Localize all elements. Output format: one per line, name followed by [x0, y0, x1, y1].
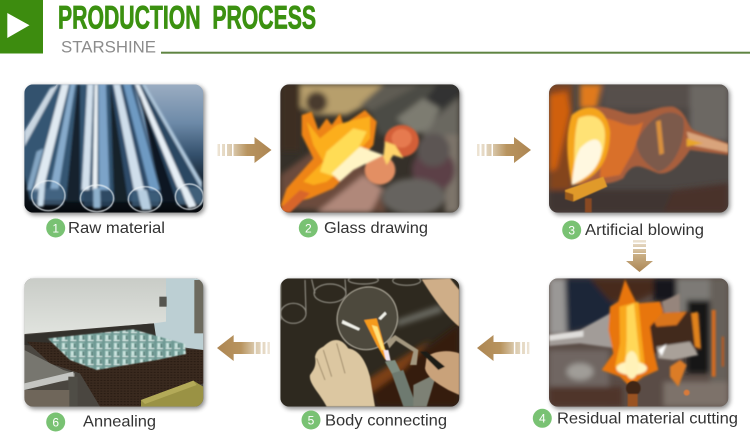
- caption 6: Annealing: [83, 414, 156, 430]
- caption 2: Glass drawing: [324, 220, 428, 237]
- panel: glass drawing: [280, 84, 461, 238]
- photo: flame cutting glass: [549, 278, 728, 407]
- photo: flame on glass tubes: [280, 84, 459, 215]
- panel: raw material: [24, 84, 205, 238]
- caption 3: Artificial blowing: [585, 222, 704, 239]
- panel: artificial blowing: [549, 84, 730, 240]
- caption 2: 2: [305, 221, 312, 235]
- photo: glasses on conveyor: [24, 278, 203, 407]
- arrow: step 3 to 4: [626, 240, 653, 272]
- photo: torch joining glass: [280, 276, 459, 407]
- caption 3: 3: [568, 223, 575, 237]
- arrow: step 1 to 2: [218, 137, 272, 163]
- caption 6: 6: [52, 415, 59, 429]
- caption 1: Raw material: [68, 220, 165, 237]
- arrow: step 4 to 5: [477, 335, 529, 361]
- photo: blown glass in flame: [549, 84, 728, 213]
- subtitle: brand name: STARSHINE: [61, 38, 156, 56]
- header rule: [161, 52, 750, 54]
- caption 1: 1: [52, 221, 59, 235]
- icon: green play square: [0, 0, 43, 54]
- header: [0, 0, 750, 56]
- panel: annealing: [24, 278, 205, 432]
- caption 4: Residual material cutting: [557, 410, 738, 428]
- title: PRODUCTION PROCESS: [58, 0, 316, 36]
- panel: body connecting: [280, 276, 461, 430]
- caption 5: 5: [308, 413, 315, 427]
- arrow: step 2 to 3: [477, 137, 531, 163]
- panel: residual material cutting: [533, 278, 738, 428]
- arrow: step 5 to 6: [217, 335, 270, 361]
- caption 4: 4: [539, 412, 546, 426]
- caption 5: Body connecting: [325, 412, 447, 430]
- photo: glass tubes: [24, 84, 203, 213]
- caption 6: [46, 412, 156, 432]
